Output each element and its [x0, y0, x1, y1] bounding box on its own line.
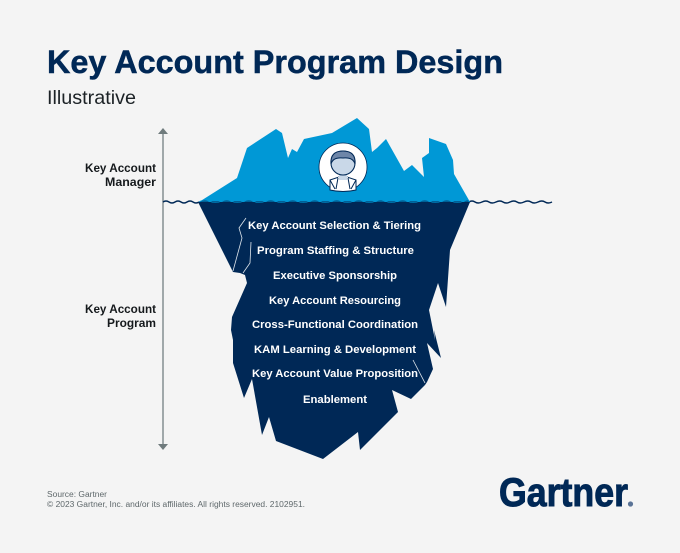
title: Key Account Program Design [47, 44, 503, 80]
label: key account manager: Manager [105, 177, 157, 189]
source and copyright: © 2023 Gartner, Inc. and/or its affiliates. All rights reserved. 2102951. [47, 500, 305, 509]
program component list: Key Account Resourcing [269, 295, 401, 307]
program component list [248, 220, 421, 406]
iceberg below water [198, 200, 470, 459]
label: key account program: Program [107, 318, 156, 330]
label: key account manager [85, 163, 157, 189]
Gartner logo: Gartner [499, 471, 628, 515]
program component list: KAM Learning & Development [254, 344, 416, 356]
label: key account program: Key Account [85, 304, 156, 316]
program component list: Executive Sponsorship [273, 270, 397, 282]
source and copyright [47, 490, 305, 509]
source and copyright: Source: Gartner [47, 490, 107, 499]
program component list: Key Account Value Proposition [252, 368, 418, 380]
program component list: Enablement [303, 394, 367, 406]
program component list: Program Staffing & Structure [257, 245, 414, 257]
label: key account manager: Key Account [85, 163, 156, 175]
iceberg above water [199, 118, 470, 202]
program component list: Cross-Functional Coordination [252, 319, 418, 331]
icon: key account manager [319, 143, 367, 192]
label: key account program [85, 304, 156, 330]
program component list: Key Account Selection & Tiering [248, 220, 421, 232]
ice cracks [233, 218, 425, 383]
water line [163, 201, 552, 203]
subtitle: Illustrative [47, 87, 136, 109]
vertical scale arrow [158, 128, 168, 450]
